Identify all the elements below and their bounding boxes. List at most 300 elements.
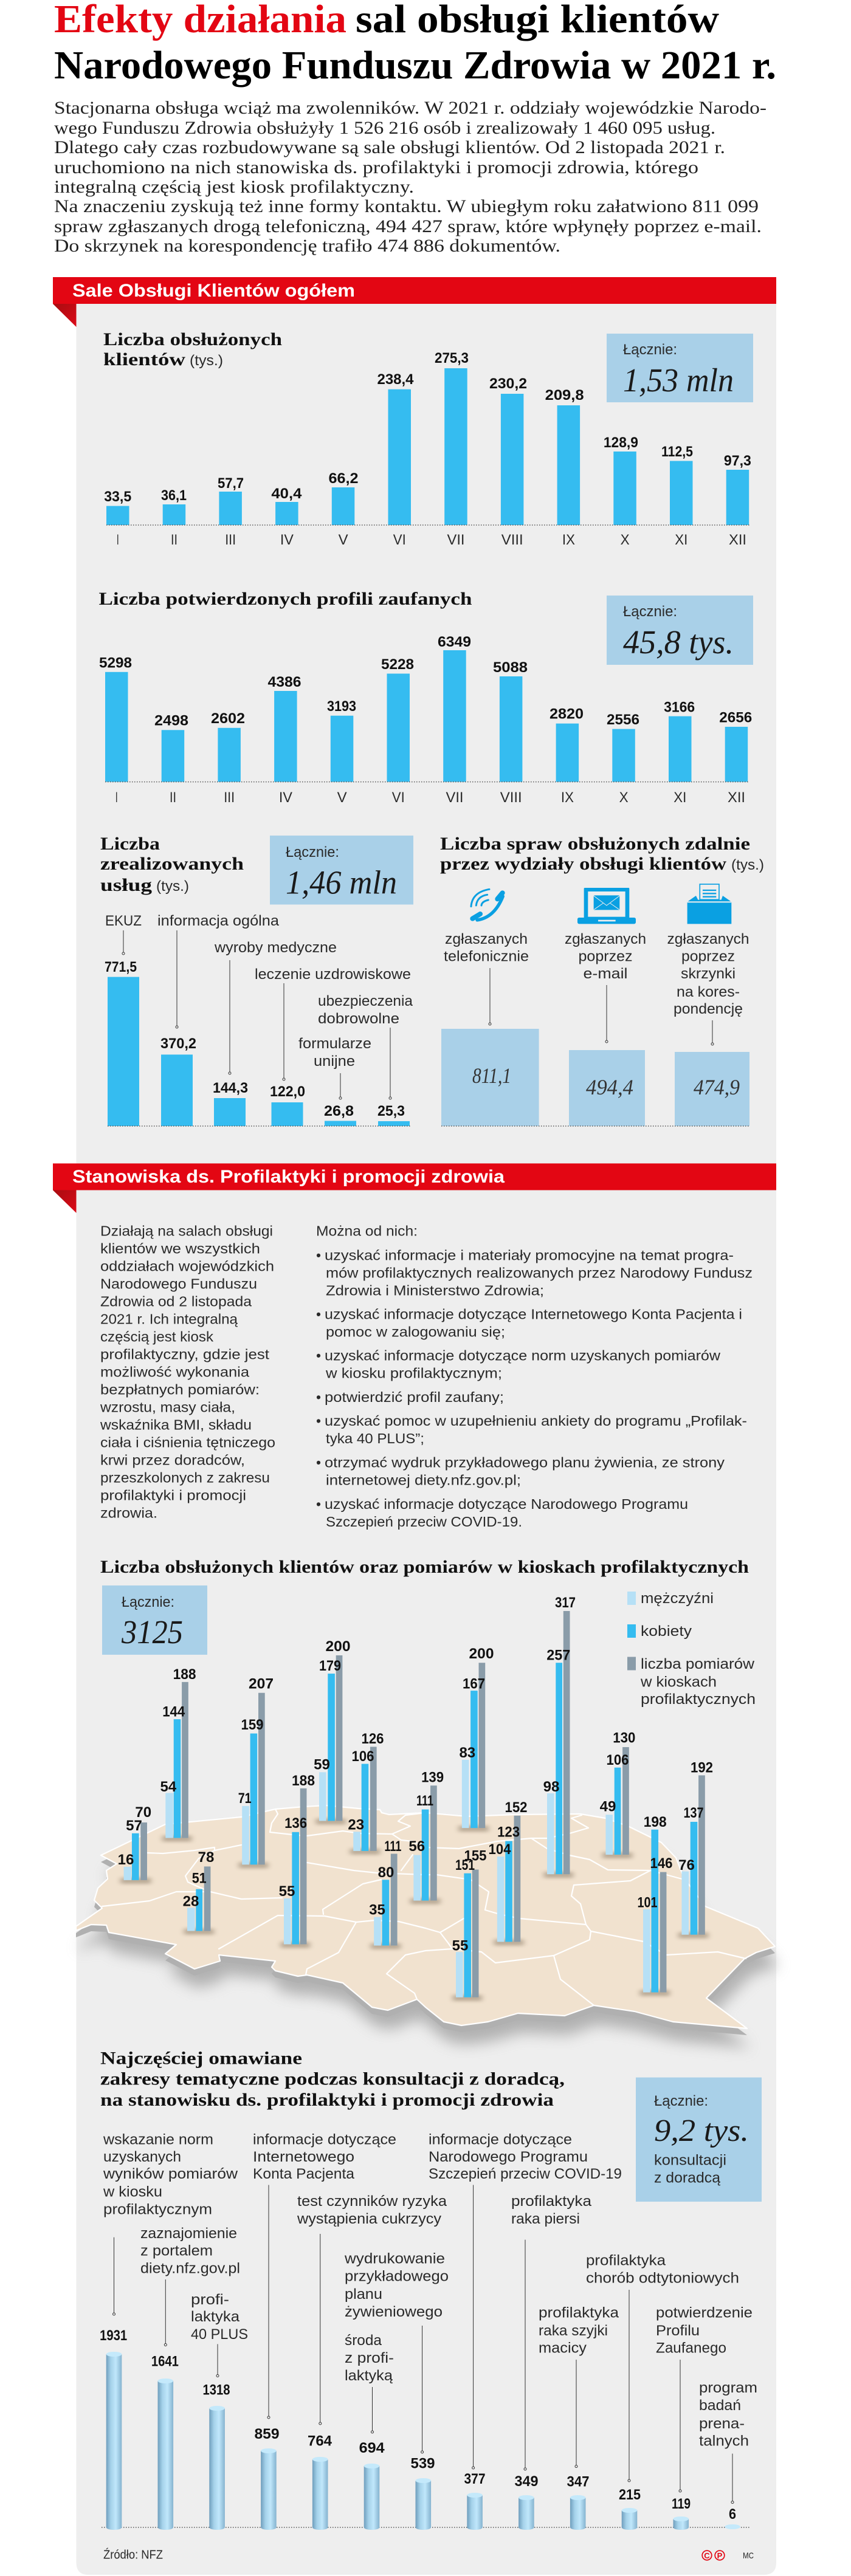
- months: I: [117, 532, 119, 548]
- text block: Można od nich: Szczepień przeciw COVID-19.: [326, 1514, 522, 1530]
- text block: Można od nich: •: [316, 1496, 321, 1512]
- group: 55 / 151 / 155: [456, 1870, 479, 1997]
- text block: Można od nich: internetowej diety.nfz.gov.pl;: [326, 1472, 521, 1488]
- topic labels: Szczepień przeciw COVID-19: [429, 2166, 622, 2182]
- group: 35 / 80 / 111: [374, 1854, 398, 1946]
- category labels: leczenie uzdrowiskowe: [255, 966, 411, 983]
- legend: profilaktycznych: [641, 1691, 756, 1708]
- map values: 126: [361, 1731, 384, 1747]
- values: 128,9: [604, 434, 638, 451]
- logo: C P: [702, 2550, 725, 2560]
- topic labels: z portalem: [140, 2243, 213, 2259]
- values: 209,8: [545, 387, 584, 404]
- group: 49 / 106 / 130: [605, 1747, 629, 1855]
- topic labels: profilaktycznym: [103, 2202, 212, 2218]
- group: 55 / 136 / 188: [284, 1788, 306, 1944]
- title: Narodowego Funduszu Zdrowia w 2021 r.: [54, 43, 776, 88]
- map values: 101: [637, 1895, 658, 1911]
- values: 57,7: [218, 475, 244, 492]
- bars on map: [120, 1611, 708, 2001]
- values: 215: [619, 2487, 641, 2503]
- map values: 317: [555, 1595, 576, 1611]
- map values: 83: [459, 1745, 475, 1761]
- banner: Sale Obsługi Klientów ogółem: [53, 277, 776, 327]
- map values: 139: [421, 1770, 444, 1786]
- icon: mailbox with letter: [687, 884, 731, 924]
- map values: 188: [173, 1666, 196, 1683]
- months: II: [170, 789, 176, 806]
- topic labels: zaznajomienie: [140, 2225, 237, 2242]
- labels: na kores-: [677, 984, 740, 1000]
- labels: [444, 931, 749, 1017]
- topic labels: talnych: [699, 2433, 749, 2450]
- values: 1318: [203, 2382, 230, 2399]
- months: V: [337, 789, 347, 806]
- banner: Stanowiska ds. Profilaktyki i promocji zdrowia: Stanowiska ds. Profilaktyki i promocji zdrowia: [72, 1167, 505, 1187]
- map values: 179: [319, 1658, 341, 1674]
- months: I: [115, 789, 118, 806]
- months: X: [621, 532, 630, 548]
- text block: opis stanowisk: wzrostu, masy ciała,: [100, 1399, 235, 1415]
- labels: zgłaszanych: [667, 931, 749, 947]
- topic labels: raka szyjki: [539, 2323, 608, 2339]
- topic labels: test czynników ryzyka: [297, 2193, 447, 2210]
- map values: 192: [691, 1760, 713, 1776]
- months: V: [339, 532, 348, 548]
- values: 2556: [607, 712, 639, 728]
- intro text block: [54, 98, 767, 256]
- map values: 106: [607, 1752, 629, 1768]
- values: 230,2: [489, 376, 527, 392]
- map values: 130: [613, 1730, 635, 1747]
- category labels: [105, 913, 413, 1070]
- map chart: klienci i pomiary w kioskach: [76, 1557, 779, 2048]
- topic labels: raka piersi: [511, 2211, 580, 2227]
- topic labels: profilaktyka: [511, 2193, 592, 2210]
- panel: gray background: [77, 303, 776, 2575]
- values: 122,0: [270, 1084, 305, 1100]
- bars: [108, 977, 410, 1126]
- map values: 146: [650, 1855, 672, 1872]
- values: 811,1: [472, 1063, 511, 1088]
- heading: (tys.): [156, 878, 189, 895]
- values: 349: [514, 2473, 539, 2490]
- topic labels: Konta Pacjenta: [253, 2166, 355, 2182]
- callout: łącznie 1,53 mln: [607, 334, 753, 402]
- text block: Można od nich: uzyskać informacje dotyczące norm uzyskanych pomiarów: [325, 1348, 720, 1364]
- group: 76 / 137 / 192: [681, 1775, 705, 1935]
- text block: Można od nich: •: [316, 1389, 321, 1405]
- heading: Liczba obsłużonych: [103, 329, 282, 349]
- intro text block: integralną częścią jest kiosk profilaktyczny.: [54, 177, 414, 197]
- text block: opis stanowisk: częścią jest kiosk: [100, 1328, 214, 1344]
- text block: Można od nich: •: [316, 1348, 321, 1364]
- group: 98 / 257 / 317: [547, 1611, 570, 1874]
- map values: 159: [241, 1717, 264, 1733]
- map values: 152: [505, 1799, 528, 1816]
- topic labels: badań: [699, 2397, 741, 2414]
- values: 5298: [99, 655, 132, 671]
- months: IX: [561, 789, 574, 806]
- map values: 151: [455, 1857, 475, 1874]
- group: 54 / 144 / 188: [165, 1682, 188, 1838]
- values: 3193: [327, 698, 356, 715]
- map values: 76: [678, 1857, 695, 1874]
- labels: pondencję: [674, 1001, 743, 1017]
- topic labels: przykładowego: [345, 2269, 449, 2285]
- topic labels: profilaktyka: [539, 2305, 619, 2321]
- map values: 198: [644, 1814, 667, 1830]
- values: 3166: [664, 699, 695, 715]
- map values: 59: [314, 1757, 330, 1773]
- text block: opis stanowisk: profilaktyki i promocji: [100, 1488, 246, 1503]
- months: VIII: [501, 532, 523, 548]
- values: 144,3: [213, 1080, 248, 1096]
- callout: łącznie 3125: [102, 1585, 207, 1655]
- values: 6: [729, 2506, 736, 2523]
- heading: usług: [100, 875, 152, 895]
- text block: opis stanowisk: ciała i ciśnienia tętniczego: [100, 1434, 275, 1450]
- topic labels: wyników pomiarów: [103, 2166, 238, 2182]
- labels: zgłaszanych: [565, 931, 646, 947]
- values: [99, 634, 752, 729]
- banner: Sale Obsługi Klientów ogółem: Sale Obsługi Klientów ogółem: [72, 281, 355, 301]
- values: [472, 1063, 740, 1099]
- values: 2656: [719, 709, 752, 726]
- icon: laptop with envelope: [577, 888, 636, 924]
- months: III: [224, 789, 235, 806]
- topic labels: profilaktyka: [586, 2253, 666, 2269]
- category labels: EKUZ: [105, 913, 142, 929]
- values: 539: [411, 2455, 435, 2471]
- topic labels: wydrukowanie: [344, 2251, 445, 2267]
- legend: [627, 1590, 756, 1708]
- legend: w kioskach: [640, 1674, 717, 1691]
- cylinders: [106, 2352, 740, 2530]
- intro text block: Dlatego cały czas rozbudowywane są sale obsługi klientów. Od 2 listopada 2021 r.: [54, 137, 725, 157]
- heading: Liczba obsłużonych klientów oraz pomiarów w kioskach profilaktycznych: [100, 1557, 749, 1577]
- map values: 111: [384, 1838, 401, 1855]
- values: 66,2: [328, 470, 359, 487]
- months: [117, 532, 746, 548]
- months: IV: [279, 789, 292, 806]
- labels: zgłaszanych: [445, 931, 528, 947]
- category labels: wyroby medyczne: [214, 939, 337, 956]
- values: 26,8: [324, 1103, 354, 1119]
- chart: Liczba obsłużonych klientów: [103, 329, 753, 548]
- callout: łącznie 45,8 tys.: 45,8 tys.: [623, 623, 734, 661]
- values: 119: [672, 2496, 691, 2512]
- topic labels: prena-: [699, 2416, 745, 2432]
- values: 494,4: [586, 1075, 633, 1099]
- leader lines: [122, 930, 391, 1099]
- text block: opis stanowisk: Zdrowia od 2 listopada: [100, 1293, 252, 1309]
- topic labels: Narodowego Programu: [429, 2149, 588, 2165]
- map values: 207: [249, 1676, 274, 1692]
- callout: łącznie 1,46 mln: Łącznie:: [286, 844, 339, 860]
- callout: łącznie 1,46 mln: [270, 836, 413, 904]
- map values: 49: [600, 1798, 616, 1815]
- group: 23 / 106 / 126: [353, 1747, 377, 1851]
- months: [115, 789, 745, 806]
- labels: telefonicznie: [444, 948, 529, 965]
- values: 275,3: [435, 350, 469, 366]
- heading: Najczęściej omawiane: [100, 2048, 302, 2069]
- callout: łącznie 9,2 tys.: konsultacji: [654, 2152, 726, 2169]
- values: 5088: [493, 659, 528, 676]
- map values: 104: [489, 1841, 511, 1858]
- topic labels: informacje dotyczące: [253, 2132, 396, 2148]
- heading: [103, 329, 282, 369]
- values: 2602: [211, 710, 245, 727]
- heading: przez wydziały obsługi klientów: [440, 854, 726, 874]
- map values: 200: [326, 1638, 350, 1655]
- map values: 70: [135, 1804, 151, 1821]
- text block: Można od nich: Zdrowia i Ministerstwo Zdrowia;: [326, 1282, 544, 1298]
- map values: 23: [348, 1817, 364, 1833]
- topic labels: uzyskanych: [103, 2149, 181, 2165]
- map values: 54: [160, 1779, 177, 1795]
- text block: Można od nich: •: [316, 1306, 321, 1322]
- topic labels: Profilu: [656, 2323, 700, 2339]
- months: XII: [728, 789, 745, 806]
- callout: łącznie 3125: 3125: [121, 1613, 183, 1650]
- text block: opis stanowisk: wskaźnika BMI, składu: [100, 1417, 252, 1433]
- category labels: ubezpieczenia: [318, 993, 413, 1009]
- values: 1931: [100, 2327, 127, 2344]
- values: 764: [308, 2433, 332, 2450]
- labels: e-mail: [584, 966, 627, 982]
- values: 859: [254, 2426, 280, 2442]
- topic labels: 40 PLUS: [191, 2326, 248, 2343]
- values: 238,4: [377, 371, 414, 388]
- map values: 136: [284, 1815, 307, 1832]
- map values: 55: [452, 1938, 468, 1954]
- map values: 155: [464, 1848, 486, 1864]
- map values: 28: [183, 1894, 199, 1909]
- topic labels: informacje dotyczące: [429, 2132, 572, 2148]
- author initials: MC: [743, 2550, 754, 2560]
- values: 33,5: [104, 489, 131, 505]
- intro text block: Stacjonarna obsługa wciąż ma zwolenników. W 2021 r. oddziały wojewódzkie Narodo-: [54, 98, 767, 118]
- topic labels: laktyka: [191, 2309, 240, 2325]
- text block: Można od nich: uzyskać informacje dotyczące Narodowego Programu: [325, 1496, 688, 1512]
- group: 104 / 123 / 152: [497, 1816, 520, 1942]
- map of Poland: [76, 1805, 779, 2048]
- heading: (tys.): [190, 352, 223, 369]
- values: 347: [567, 2473, 590, 2490]
- legend: mężczyźni: [641, 1590, 714, 1607]
- group: 59 / 179 / 200: [319, 1655, 342, 1821]
- banner: Stanowiska ds. Profilaktyki i promocji zdrowia: [53, 1163, 776, 1213]
- topic labels: Internetowego: [253, 2149, 354, 2165]
- logo: C P: P: [717, 2551, 723, 2560]
- text block: opis stanowisk: oddziałach wojewódzkich: [100, 1258, 274, 1274]
- leader lines: [113, 2185, 734, 2504]
- icon: phone: [471, 889, 503, 920]
- values: 4386: [267, 674, 301, 690]
- text block: Można od nich: [316, 1223, 753, 1530]
- map values: 111: [416, 1793, 433, 1809]
- map values: 144: [162, 1704, 185, 1720]
- labels: skrzynki: [681, 966, 736, 982]
- chart: najczęściej omawiane zakresy tematyczne: [100, 2048, 762, 2530]
- legend: liczba pomiarów: [641, 1656, 755, 1672]
- category labels: informacja ogólna: [157, 913, 280, 929]
- values: [105, 959, 405, 1119]
- category labels: formularze: [298, 1036, 371, 1052]
- topic labels: macicy: [539, 2340, 587, 2357]
- callout: łącznie 1,46 mln: 1,46 mln: [286, 864, 397, 901]
- months: III: [225, 532, 236, 548]
- months: VI: [393, 532, 406, 548]
- values: [104, 350, 751, 505]
- text block: Można od nich: potwierdzić profil zaufany;: [325, 1389, 504, 1405]
- map values: 35: [369, 1902, 385, 1918]
- heading: zrealizowanych: [100, 854, 244, 874]
- heading: [440, 834, 764, 874]
- values: 6349: [438, 634, 471, 650]
- map values: [118, 1595, 713, 1954]
- topic labels: z profi-: [345, 2350, 394, 2366]
- leader lines: [489, 968, 714, 1045]
- labels: poprzez: [579, 948, 632, 965]
- map values: 200: [469, 1646, 494, 1662]
- heading: na stanowisku ds. profilaktyki i promocji zdrowia: [100, 2090, 554, 2110]
- intro text block: spraw zgłaszanych drogą telefoniczną, 494 427 spraw, które wpłynęły poprzez e-mail.: [54, 216, 762, 236]
- text block: Można od nich: •: [316, 1455, 321, 1471]
- text block: opis stanowisk: możliwość wykonania: [100, 1364, 249, 1379]
- text block: opis stanowisk: przeszkolonych z zakresu: [100, 1469, 270, 1485]
- map values: 56: [408, 1838, 425, 1855]
- chart: Liczba spraw obsłużonych zdalnie: [440, 834, 764, 1126]
- text block: Można od nich: uzyskać informacje dotyczące Internetowego Konta Pacjenta i: [325, 1306, 742, 1322]
- values: 5228: [381, 656, 414, 673]
- values: 694: [359, 2440, 385, 2456]
- map values: 257: [546, 1647, 570, 1664]
- months: IV: [280, 532, 294, 548]
- text block: opis stanowisk: 2021 r. Ich integralną: [100, 1311, 238, 1327]
- values: 112,5: [661, 444, 693, 460]
- callout: łącznie 45,8 tys.: Łącznie:: [623, 603, 677, 620]
- values: 2498: [154, 712, 188, 729]
- source: Źródło: NFZ: [103, 2548, 163, 2562]
- text block: opis stanowisk: krwi przez doradców,: [100, 1452, 245, 1468]
- text block: Można od nich: w kiosku profilaktycznym;: [325, 1365, 502, 1381]
- text block: Można od nich: otrzymać wydruk przykładowego planu żywienia, ze strony: [325, 1455, 725, 1471]
- text block: opis stanowisk: [100, 1223, 275, 1520]
- values: 370,2: [160, 1036, 196, 1052]
- heading: Liczba: [100, 834, 160, 854]
- topic labels: żywieniowego: [345, 2304, 443, 2320]
- labels: poprzez: [681, 948, 735, 965]
- months: XI: [675, 532, 687, 548]
- values: 377: [464, 2471, 485, 2487]
- bars: [106, 368, 749, 525]
- values: 771,5: [105, 959, 137, 975]
- text block: Można od nich: •: [316, 1247, 321, 1263]
- heading: zakresy tematyczne podczas konsultacji z doradcą,: [100, 2069, 565, 2089]
- values: 36,1: [161, 487, 187, 504]
- topic labels: profi-: [191, 2292, 229, 2308]
- callout: łącznie 9,2 tys.: 9,2 tys.: [654, 2114, 749, 2148]
- map values: 51: [192, 1870, 207, 1886]
- map values: 57: [126, 1818, 142, 1834]
- months: VIII: [500, 789, 522, 806]
- text block: Można od nich: Można od nich:: [316, 1223, 418, 1238]
- intro text block: Na znaczeniu zyskują też inne formy kontaktu. W ubiegłym roku załatwiono 811 099: [54, 196, 759, 216]
- text block: opis stanowisk: profilaktyczny, gdzie jest: [100, 1347, 270, 1362]
- values: 474,9: [694, 1075, 740, 1099]
- text block: Można od nich: tyka 40 PLUS”;: [326, 1431, 424, 1446]
- heading: Liczba spraw obsłużonych zdalnie: [440, 834, 750, 854]
- topic labels: środa: [345, 2332, 382, 2349]
- months: II: [171, 532, 177, 548]
- map values: 80: [378, 1864, 394, 1881]
- group: 28 / 51 / 78: [187, 1866, 210, 1931]
- callout: łącznie 3125: Łącznie:: [122, 1594, 174, 1610]
- group: 16 / 57 / 70: [124, 1822, 147, 1880]
- topic labels: potwierdzenie: [656, 2305, 753, 2321]
- logo: C P: C: [704, 2551, 710, 2560]
- group: 83 / 167 / 200: [462, 1663, 485, 1828]
- heading: [100, 834, 244, 895]
- text block: opis stanowisk: Narodowego Funduszu: [100, 1276, 257, 1292]
- heading: (tys.): [731, 857, 764, 873]
- map values: 123: [497, 1824, 520, 1841]
- callout: łącznie 9,2 tys.: Łącznie:: [654, 2093, 708, 2109]
- callout: łącznie 45,8 tys.: [607, 596, 753, 665]
- chart: Liczba potwierdzonych profili zaufanych: [98, 589, 753, 806]
- text block: opis stanowisk: zdrowia.: [100, 1505, 157, 1520]
- topic labels: wystąpienia cukrzycy: [297, 2211, 441, 2227]
- heading: klientów: [103, 349, 185, 369]
- intro text block: Do skrzynek na korespondencję trafiło 474 886 dokumentów.: [54, 236, 560, 256]
- text block: Można od nich: uzyskać pomoc w uzupełnieniu ankiety do programu „Profilak-: [325, 1413, 747, 1429]
- values: [100, 2327, 736, 2523]
- values: 1641: [151, 2354, 179, 2370]
- map values: 188: [292, 1773, 315, 1789]
- months: VI: [392, 789, 405, 806]
- text block: Można od nich: mów profilaktycznych realizowanych przez Narodowy Fundusz: [326, 1265, 753, 1280]
- callout: łącznie 1,53 mln: 1,53 mln: [623, 362, 734, 399]
- months: XI: [674, 789, 686, 806]
- months: X: [619, 789, 629, 806]
- values: 97,3: [724, 453, 751, 469]
- map values: 16: [118, 1852, 134, 1868]
- group: 56 / 111 / 139: [413, 1785, 437, 1901]
- topic labels: w kiosku: [103, 2184, 162, 2200]
- bars: [441, 1029, 749, 1126]
- text block: opis stanowisk: klientów we wszystkich: [100, 1241, 260, 1257]
- intro text block: uruchomiono na nich stanowiska ds. profilaktyki i promocji zdrowia, którego: [54, 157, 698, 177]
- heading: [100, 2048, 565, 2110]
- topic labels: program: [699, 2380, 757, 2396]
- months: VII: [446, 789, 463, 806]
- values: 2820: [550, 706, 584, 723]
- group: 71 / 159 / 207: [242, 1693, 265, 1864]
- text block: opis stanowisk: bezpłatnych pomiarów:: [100, 1382, 260, 1398]
- months: VII: [447, 532, 464, 548]
- map values: 78: [198, 1849, 214, 1866]
- group: 101 / 198 / 146: [643, 1830, 666, 1993]
- legend: kobiety: [641, 1623, 692, 1640]
- callout: łącznie 1,53 mln: Łącznie:: [623, 342, 677, 358]
- topic labels: planu: [345, 2286, 382, 2303]
- months: XII: [729, 532, 746, 548]
- map values: 71: [238, 1790, 252, 1807]
- text block: Można od nich: uzyskać informacje i materiały promocyjne na temat progra-: [325, 1247, 734, 1263]
